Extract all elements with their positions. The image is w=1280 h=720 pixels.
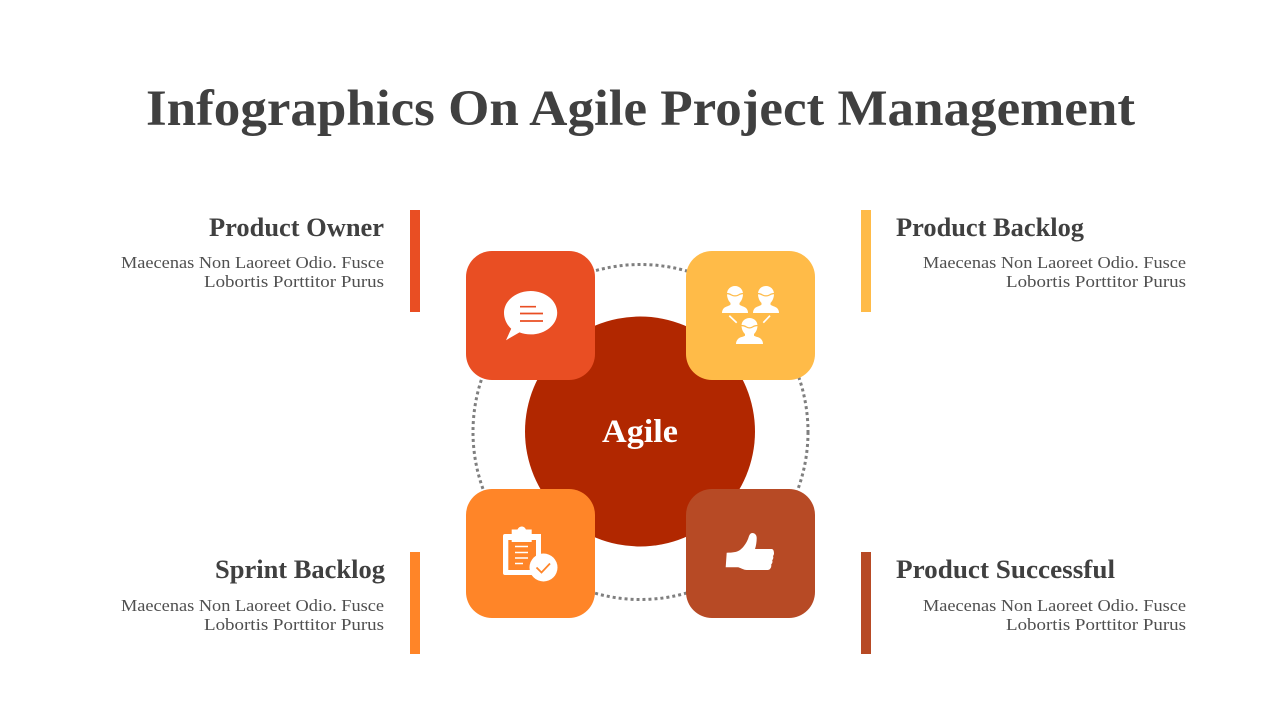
center circle: Agile: Agile bbox=[602, 414, 678, 450]
panel: product owner: Maecenas Non Laoreet Odio. Fusce bbox=[121, 253, 384, 272]
tile: sprint backlog clipboard bbox=[466, 489, 595, 618]
panel: product successful: Lobortis Porttitor Purus bbox=[1006, 615, 1186, 634]
panel: sprint backlog: Sprint Backlog bbox=[215, 555, 385, 584]
panel: product backlog: Maecenas Non Laoreet Odio. Fusce bbox=[923, 253, 1186, 272]
panel: product backlog: Product Backlog bbox=[896, 213, 1084, 242]
panel: product successful: Product Successful bbox=[896, 555, 1115, 584]
tile: product owner speech bubble bbox=[466, 251, 595, 380]
panel: product successful bbox=[861, 552, 1186, 654]
panel: sprint backlog bbox=[121, 552, 420, 654]
panel: product owner: Lobortis Porttitor Purus bbox=[204, 272, 384, 291]
dotted ring bbox=[473, 264, 808, 600]
panel: product owner bbox=[121, 210, 420, 312]
tile: product successful thumbs up bbox=[686, 489, 815, 618]
tile: product backlog team icon bbox=[686, 251, 815, 380]
title: Infographics On Agile Project Management bbox=[146, 81, 1135, 137]
panel: product backlog: Lobortis Porttitor Purus bbox=[1006, 272, 1186, 291]
panel: product owner: Product Owner bbox=[209, 213, 384, 242]
panel: sprint backlog: Maecenas Non Laoreet Odio. Fusce bbox=[121, 596, 384, 615]
panel: product backlog bbox=[861, 210, 1186, 312]
panel: product successful: Maecenas Non Laoreet Odio. Fusce bbox=[923, 596, 1186, 615]
panel: sprint backlog: Lobortis Porttitor Purus bbox=[204, 615, 384, 634]
center circle: Agile bbox=[525, 316, 755, 546]
